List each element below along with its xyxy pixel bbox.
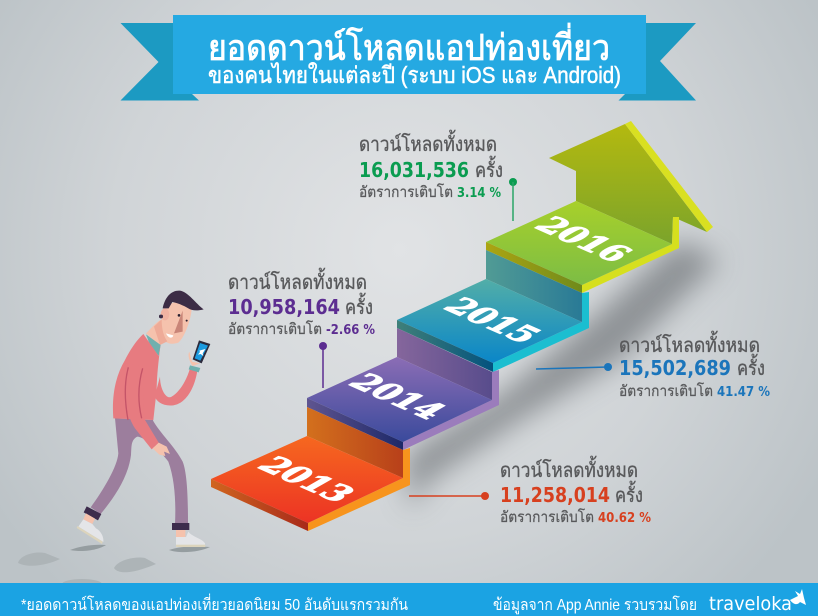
trouser cuffs [84, 506, 189, 530]
callout 2015: ดาวน์โหลดทั้งหมด [619, 331, 760, 357]
front leg [127, 420, 188, 524]
front sleeve [124, 363, 159, 449]
mouth [166, 333, 173, 338]
footer bar [0, 583, 818, 616]
footnote: *ยอดดาวน์โหลดของแอปท่องเที่ยวยอดนิยม 50 อันดับแรกรวมกัน [21, 593, 408, 614]
title line 2: ของคนไทยในแต่ละปี (ระบบ iOS และ Android) [208, 62, 621, 88]
ground shadows [18, 545, 210, 589]
sweater folds [125, 367, 143, 420]
callout 2014: อัตราการเติบโต [228, 320, 322, 338]
title line 1: ยอดดาวน์โหลดแอปท่องเที่ยว [208, 23, 610, 68]
eyes [178, 314, 180, 317]
phone [193, 340, 210, 363]
back leg [91, 418, 153, 514]
step 2015 [397, 250, 589, 372]
sweater body [113, 334, 161, 420]
callout 2013 [409, 456, 651, 526]
callout 2016: ครั้ง [475, 156, 503, 182]
step 2016 with arrow [486, 121, 713, 293]
callout 2015 [536, 331, 770, 400]
callout 2016: 3.14 % [457, 186, 501, 201]
staircase [211, 121, 713, 531]
callout 2014 [228, 268, 375, 388]
callout 2016: 16,031,536 [359, 158, 469, 182]
neck shade [154, 319, 167, 345]
callout 2016: ดาวน์โหลดทั้งหมด [359, 130, 497, 156]
raised arm [155, 368, 197, 406]
year label 2013: 2013 [249, 451, 365, 507]
collar [146, 334, 161, 356]
year label 2015: 2015 [435, 292, 551, 348]
callout 2016: อัตราการเติบโต [359, 183, 453, 201]
callout 2015: ครั้ง [737, 354, 765, 380]
neck and face [146, 302, 192, 345]
year label 2016: 2016 [526, 211, 642, 267]
sideburn [159, 315, 163, 318]
title ribbon [120, 15, 696, 100]
callout 2016 [359, 130, 517, 221]
callout 2015: 15,502,689 [619, 356, 731, 380]
callout 2015: 41.47 % [717, 385, 770, 400]
step 2013 [211, 407, 410, 531]
callout 2013: ดาวน์โหลดทั้งหมด [500, 456, 638, 482]
callout 2013: 11,258,014 [500, 483, 610, 507]
stair shadow [405, 240, 720, 510]
callout 2014: 10,958,164 [228, 295, 340, 319]
ear [161, 308, 169, 320]
callout 2013: 40.62 % [598, 511, 651, 526]
step 2014 [307, 328, 499, 450]
nose [174, 311, 183, 333]
year label 2014: 2014 [340, 368, 456, 424]
traveloka logo: traveloka [709, 593, 792, 615]
hair [163, 291, 204, 310]
person holding phone [77, 291, 210, 547]
callout 2014: ดาวน์โหลดทั้งหมด [228, 268, 367, 294]
source credit: ข้อมูลจาก App Annie รวบรวมโดย [493, 595, 697, 615]
callout 2014: -2.66 % [326, 323, 375, 338]
callout 2013: ครั้ง [615, 481, 643, 507]
wrist cuff [189, 365, 200, 372]
callout 2015: อัตราการเติบโต [619, 382, 713, 400]
lower hand [153, 443, 170, 456]
shoes [77, 513, 205, 547]
phone hand [189, 352, 200, 366]
callout 2013: อัตราการเติบโต [500, 508, 594, 526]
callout 2014: ครั้ง [345, 293, 373, 319]
